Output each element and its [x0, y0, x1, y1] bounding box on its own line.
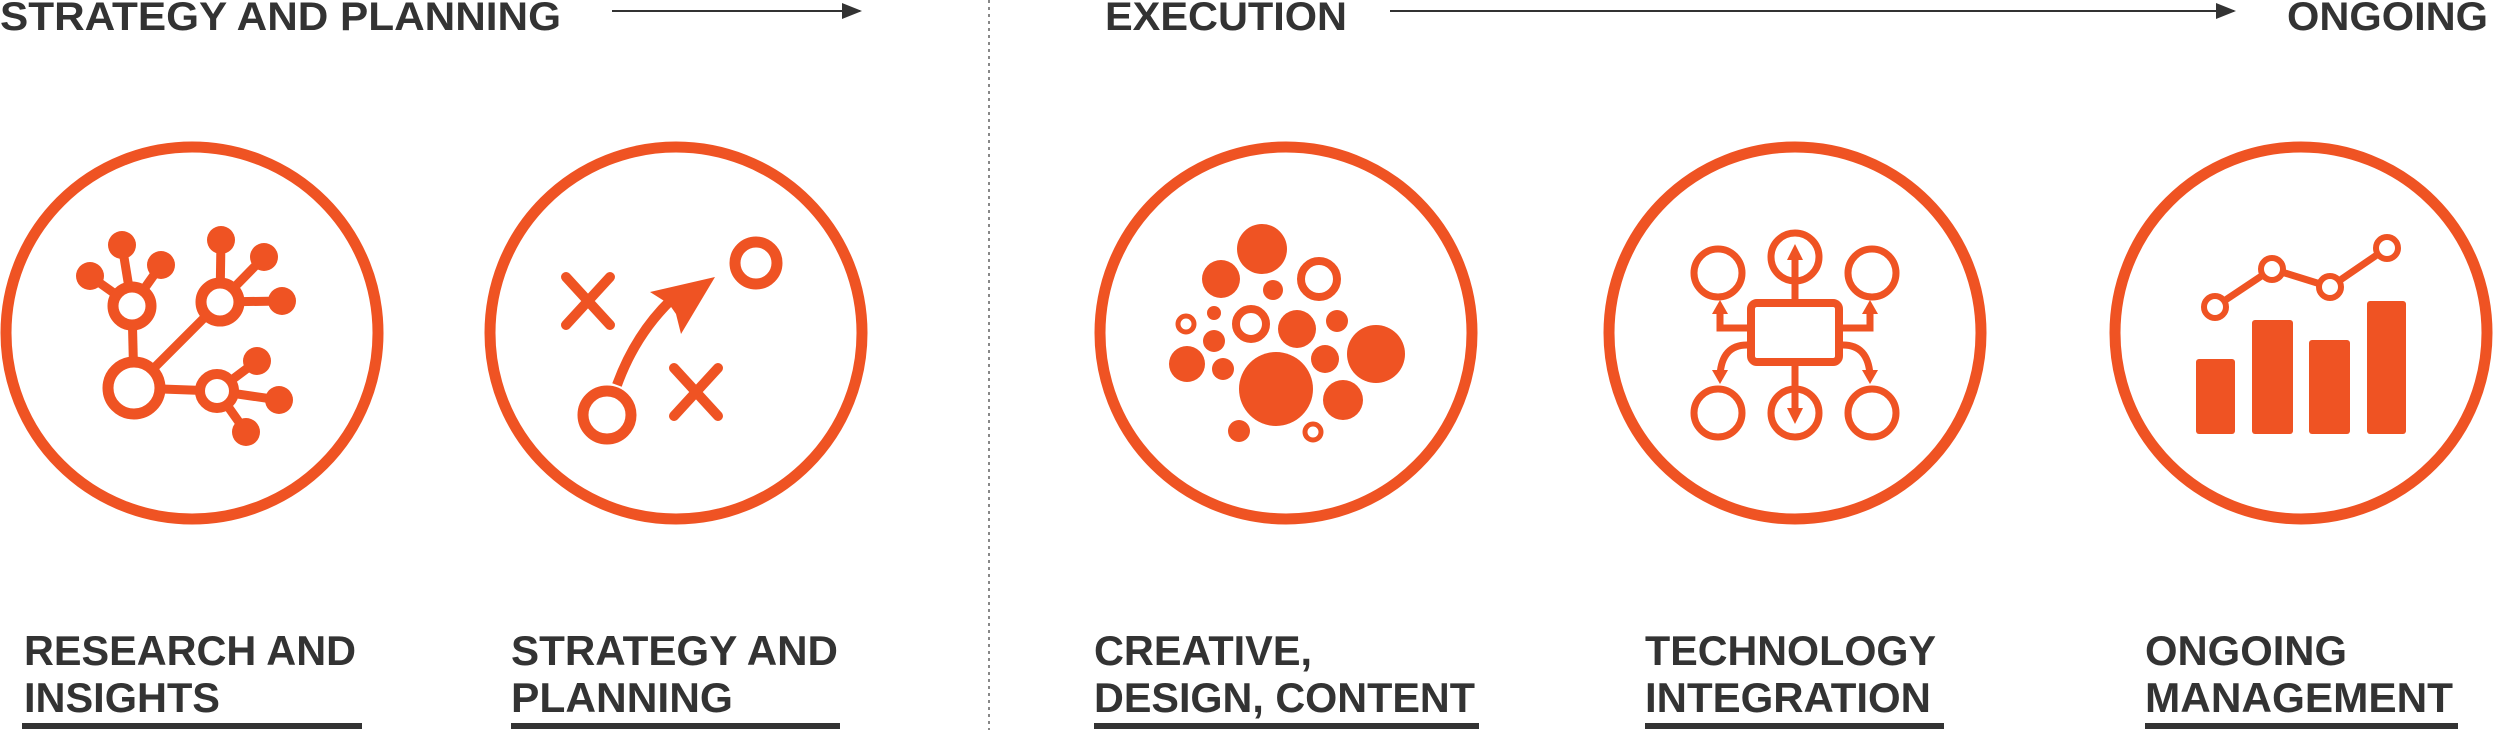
label: strategy and planning: PLANNING — [511, 674, 733, 721]
icon: integration hub — [1694, 233, 1896, 437]
panel: ongoing management — [2115, 147, 2487, 729]
label: ongoing management: MANAGEMENT — [2145, 674, 2453, 721]
label: technology integration: INTEGRATION — [1645, 674, 1931, 721]
arrow: execution — [1390, 10, 2234, 12]
label: technology integration — [1645, 627, 1944, 729]
label: creative design content: DESIGN, CONTENT — [1094, 674, 1475, 721]
panel: technology integration — [1609, 147, 1981, 729]
icon: bar chart with trend — [2196, 237, 2406, 434]
icon: bubbles — [1169, 224, 1405, 442]
label: ongoing management: ONGOING — [2145, 627, 2347, 674]
panel: strategy and planning — [490, 147, 862, 729]
label: research and insights — [22, 627, 362, 729]
label: creative design content — [1094, 627, 1479, 729]
label: strategy and planning — [511, 627, 840, 729]
label: creative design content: CREATIVE, — [1094, 627, 1312, 674]
label: strategy and planning: STRATEGY AND — [511, 627, 838, 674]
label: research and insights: RESEARCH AND — [24, 627, 356, 674]
arrow: strategy — [612, 10, 860, 12]
panel: creative design content — [1094, 147, 1479, 729]
icon: play diagram — [566, 242, 777, 439]
label: research and insights: INSIGHTS — [24, 674, 220, 721]
icon: network — [90, 240, 282, 432]
panel: research and insights — [6, 147, 378, 729]
label: ongoing management — [2145, 627, 2458, 729]
label: technology integration: TECHNOLOGY — [1645, 627, 1936, 674]
